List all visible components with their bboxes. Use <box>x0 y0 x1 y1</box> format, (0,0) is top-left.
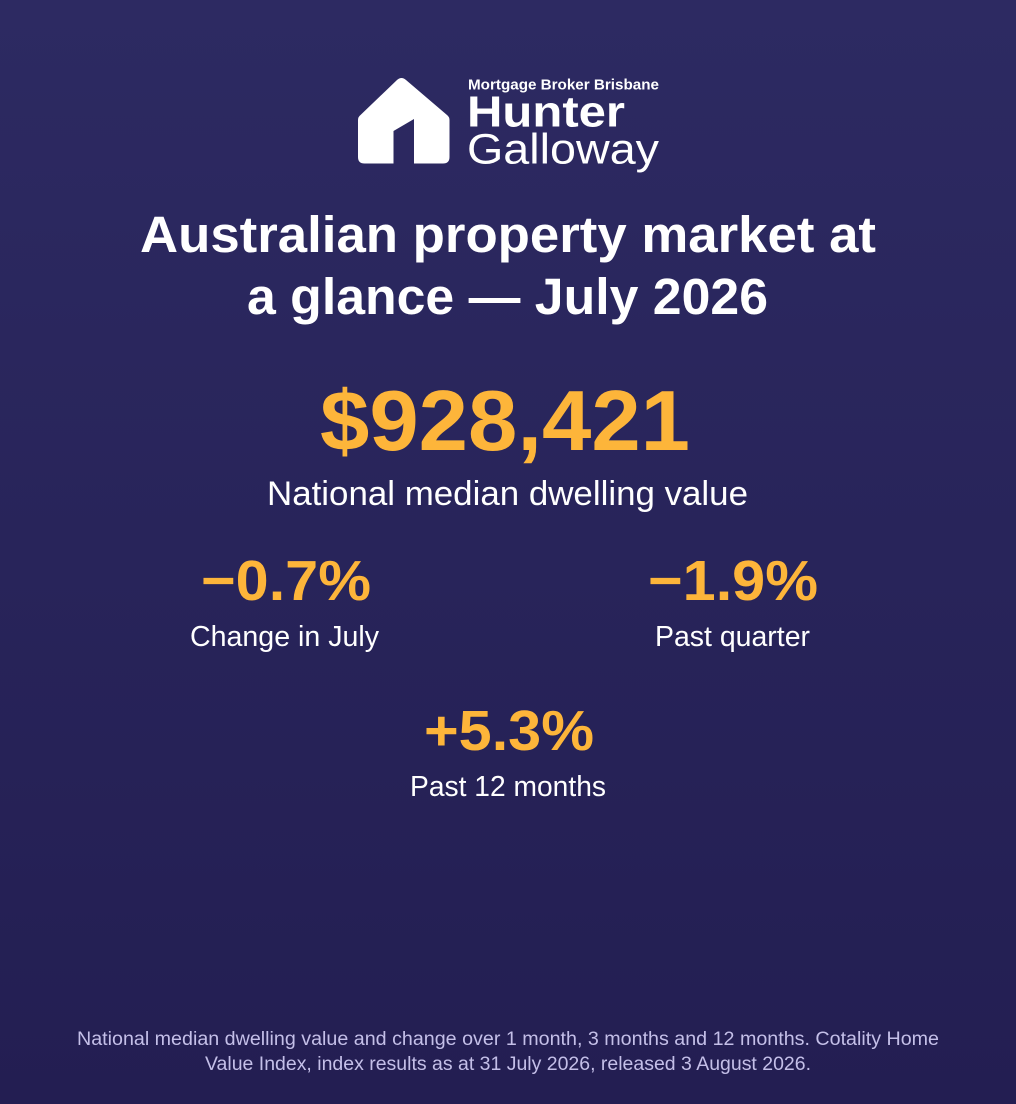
headline label: National median dwelling value <box>267 475 748 513</box>
stat: past quarter <box>648 549 818 653</box>
value: −0.7% <box>201 549 371 613</box>
icon: house <box>358 78 450 164</box>
label: Change in July <box>190 621 379 653</box>
title: a glance — July 2026 <box>247 268 768 325</box>
label: Past 12 months <box>410 771 606 803</box>
logo wordmark: Hunter: Hunter <box>467 88 625 136</box>
title: Australian property market at <box>140 206 876 263</box>
value: −1.9% <box>648 549 818 613</box>
value: +5.3% <box>424 699 594 763</box>
logo tagline: Mortgage Broker Brisbane <box>468 78 659 94</box>
footnote <box>77 1029 939 1075</box>
headline stat: national median dwelling value <box>267 374 748 513</box>
footnote: National median dwelling value and change over 1 month, 3 months and 12 months. Cotality Home <box>77 1029 939 1050</box>
headline number: $928,421 <box>320 374 690 469</box>
label: Past quarter <box>655 621 810 653</box>
stat: past 12 months <box>410 699 606 803</box>
footnote: Value Index, index results as at 31 July 2026, released 3 August 2026. <box>205 1054 811 1075</box>
logo wordmark: Galloway: Galloway <box>467 126 660 174</box>
title <box>140 206 876 325</box>
stat: change in July <box>190 549 379 653</box>
logo: Hunter Galloway <box>358 78 660 174</box>
